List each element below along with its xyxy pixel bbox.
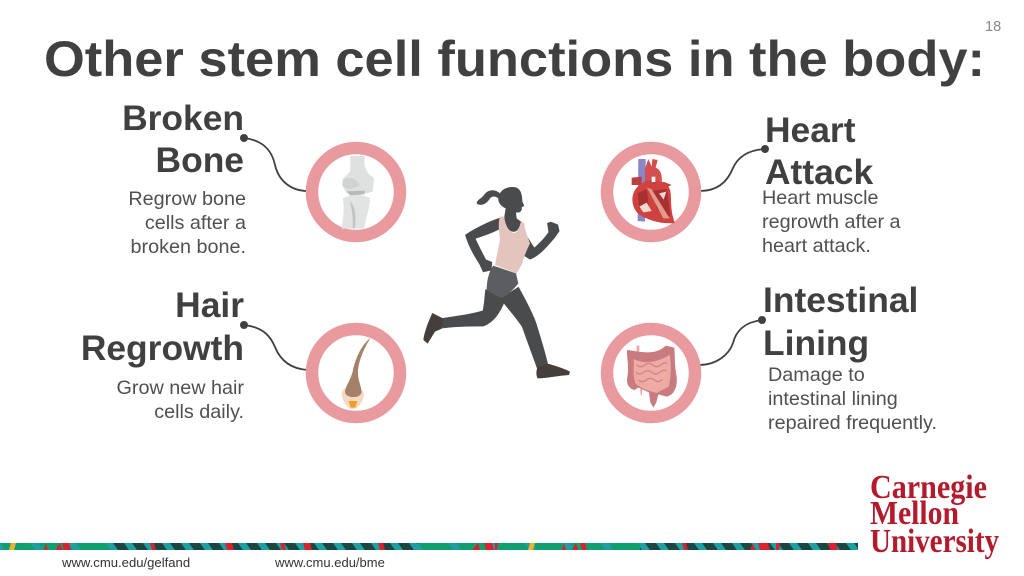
head and neck xyxy=(498,187,524,232)
heading: broken bone: Broken xyxy=(122,98,244,138)
icon ring: bone xyxy=(312,148,400,236)
heading: hair regrowth: Hair xyxy=(175,285,244,325)
connector: hair xyxy=(240,321,308,370)
icon: knee bones xyxy=(342,156,374,229)
text: heart description: regrowth after a xyxy=(762,211,901,233)
text: heart description: Heart muscle xyxy=(762,187,879,209)
logo: Carnegie Mellon University: Mellon xyxy=(870,495,959,532)
back leg xyxy=(441,290,505,328)
heading: heart attack: Heart xyxy=(765,110,855,150)
front shoe xyxy=(536,364,570,378)
text: hair description: cells daily. xyxy=(154,401,244,423)
heading: heart attack: Attack xyxy=(765,152,873,192)
text: intestinal description: Damage to xyxy=(768,364,865,386)
footer link: bme: www.cmu.edu/bme xyxy=(274,555,385,570)
panel: broken bone xyxy=(122,98,400,258)
icon: hair follicle xyxy=(342,338,371,409)
runner figure xyxy=(423,187,570,378)
title: Other stem cell functions in the body: xyxy=(44,31,985,87)
heading: intestinal lining: Intestinal xyxy=(763,280,918,320)
page number: 18 xyxy=(985,19,1001,35)
text: hair description: Grow new hair xyxy=(116,377,244,399)
icon: heart xyxy=(632,159,675,223)
icon ring: hair xyxy=(312,329,400,417)
footer link: gelfand: www.cmu.edu/gelfand xyxy=(61,555,190,570)
heading: intestinal lining: Lining xyxy=(763,323,869,363)
heading: broken bone: Bone xyxy=(156,140,244,180)
text: broken bone description: cells after a xyxy=(145,212,246,234)
logo: Carnegie Mellon University: Carnegie xyxy=(870,469,987,506)
connector: intestinal xyxy=(699,316,766,365)
shorts xyxy=(487,266,518,298)
text: intestinal description: intestinal lining xyxy=(768,388,898,410)
back shoe xyxy=(423,313,443,344)
ponytail xyxy=(477,190,500,205)
connector: heart xyxy=(700,145,769,191)
icon: intestines xyxy=(627,346,677,408)
logo: Carnegie Mellon University xyxy=(870,469,999,560)
back arm xyxy=(466,218,502,272)
logo: Carnegie Mellon University: University xyxy=(870,523,999,560)
connector: broken bone xyxy=(240,134,308,191)
tank top xyxy=(495,217,530,273)
icon ring: heart xyxy=(607,148,695,236)
text: broken bone description: Regrow bone xyxy=(128,188,246,210)
icon ring: intestine xyxy=(607,329,695,417)
text: intestinal description: repaired frequently. xyxy=(768,412,937,434)
text: heart description: heart attack. xyxy=(762,235,871,257)
heading: hair regrowth: Regrowth xyxy=(81,328,244,368)
panel: heart attack xyxy=(607,110,901,257)
front arm xyxy=(524,222,559,259)
front leg xyxy=(501,288,548,368)
footer stripe xyxy=(0,543,858,550)
panel: hair regrowth xyxy=(81,285,400,423)
panel: intestinal lining xyxy=(607,280,937,434)
text: broken bone description: broken bone. xyxy=(131,236,246,258)
